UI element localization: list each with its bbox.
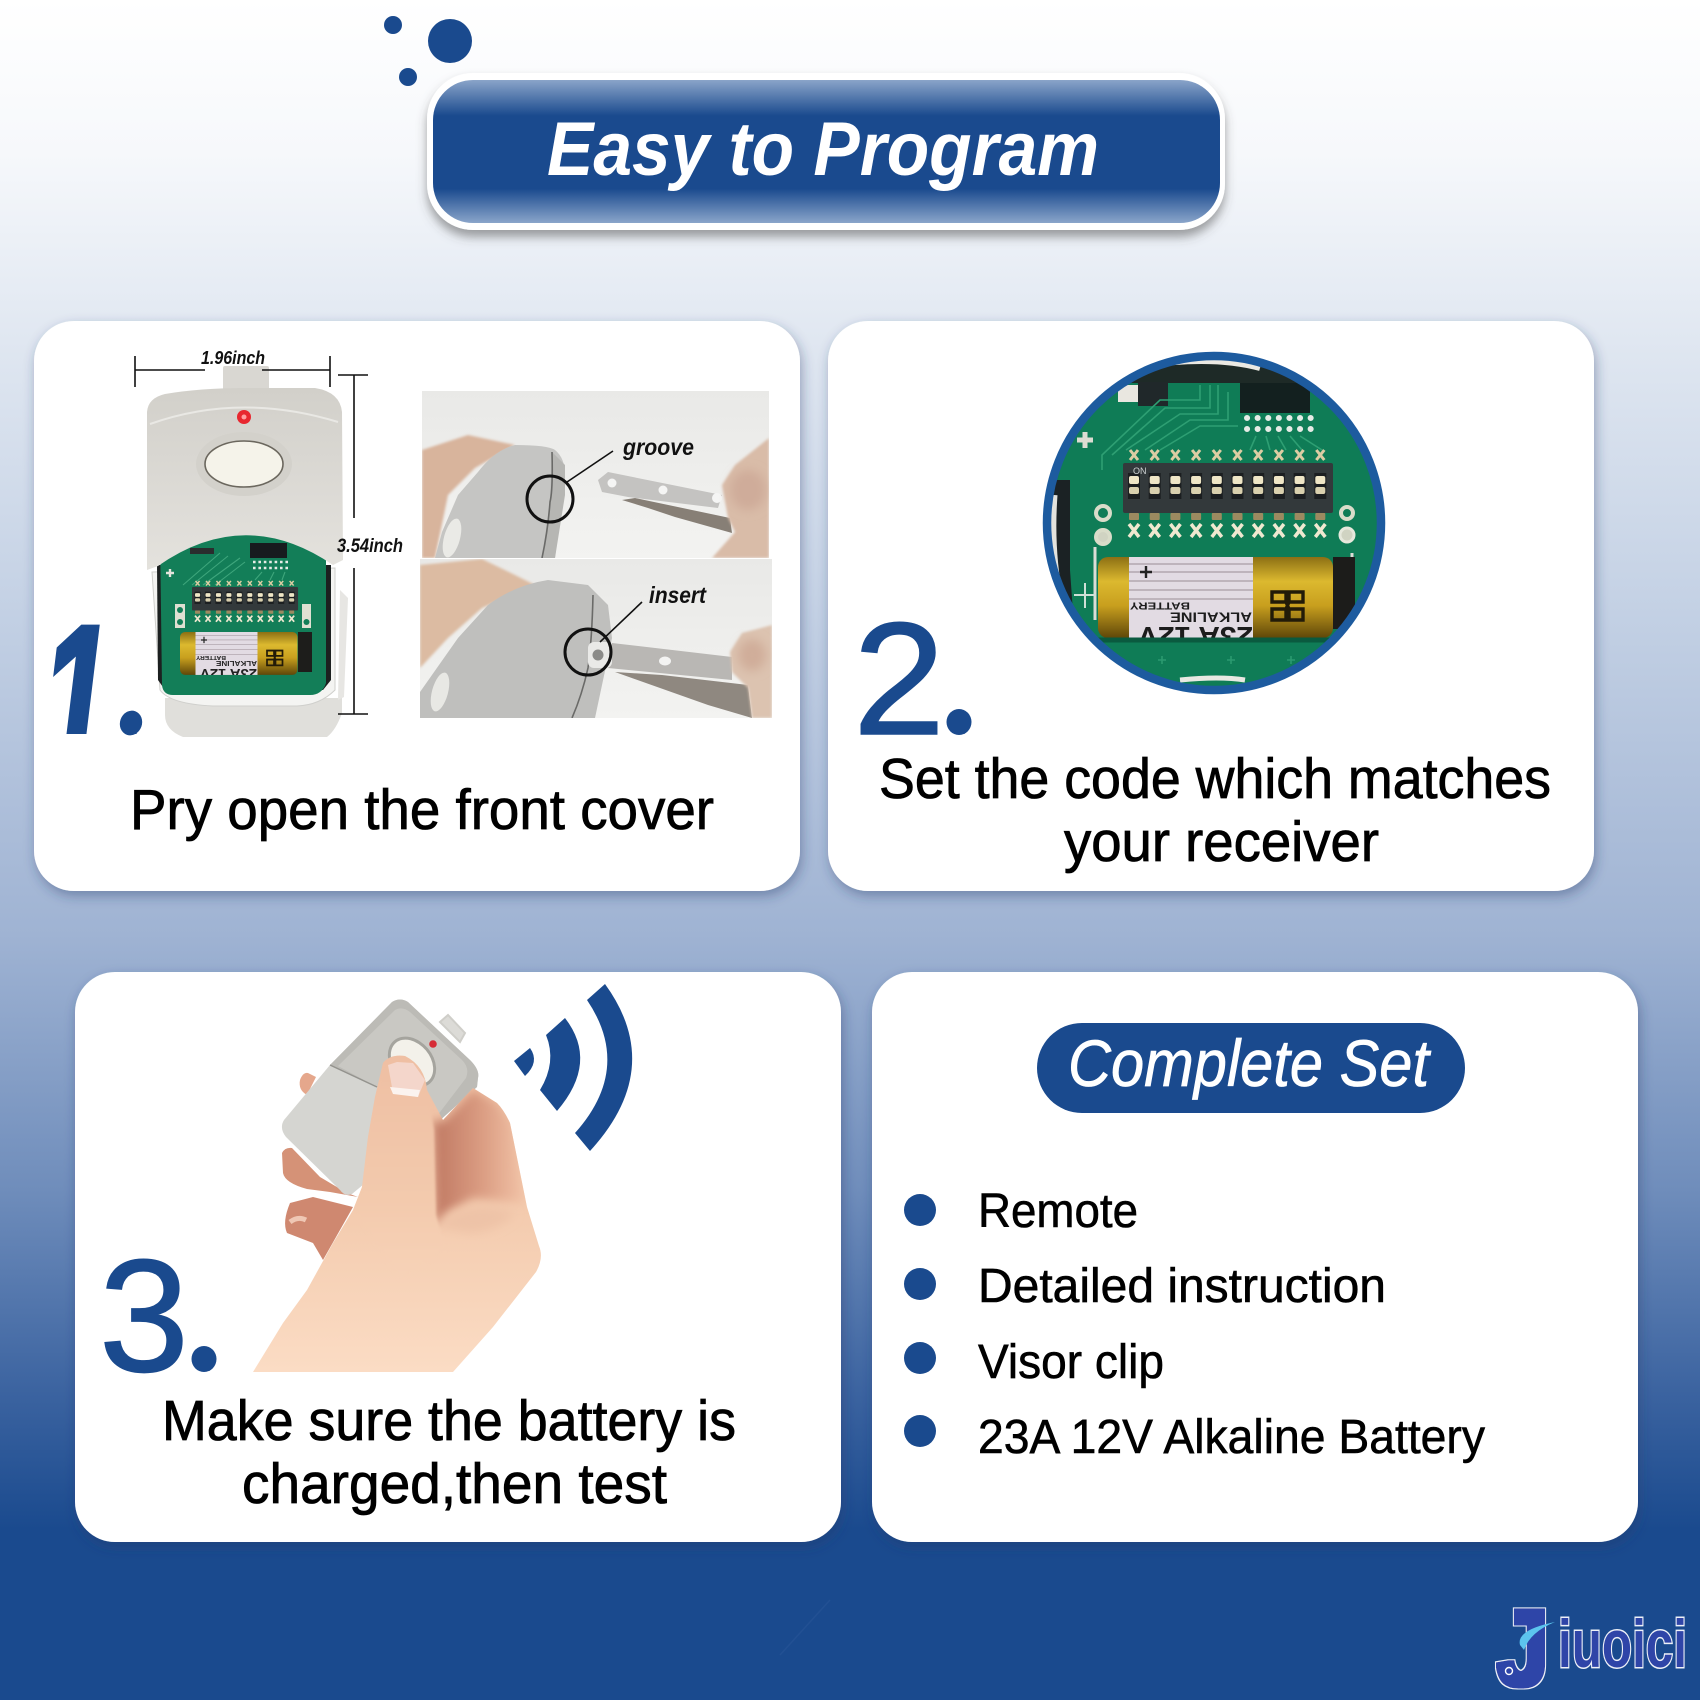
list item: visor clip	[904, 1336, 1164, 1389]
photo: insert: insert	[649, 582, 707, 608]
caption step 2: Set the code which matches	[879, 747, 1551, 811]
panel: step 3	[75, 972, 841, 1542]
battery label: ALKALINE	[216, 659, 257, 666]
number 1	[53, 624, 142, 736]
decorative dots	[384, 16, 472, 86]
panel: complete set	[872, 972, 1638, 1542]
list item: instruction: Detailed instruction	[978, 1260, 1386, 1313]
dimension: height	[337, 375, 403, 714]
battery label: ALKALINE	[1170, 610, 1252, 626]
list item: visor clip: Visor clip	[978, 1336, 1164, 1389]
panel: step 2	[828, 321, 1594, 891]
number 3: 3	[99, 1226, 189, 1405]
heading pill: Complete Set	[1068, 1026, 1431, 1100]
number 3: .	[195, 1308, 214, 1386]
caption step 1: Pry open the front cover	[130, 778, 714, 842]
number 2: 2	[853, 589, 945, 768]
list item: battery: 23A 12V Alkaline Battery	[978, 1411, 1485, 1464]
battery label: 23A 12V	[1138, 621, 1253, 652]
battery label	[196, 656, 257, 675]
dimension: width	[135, 348, 330, 387]
battery label: 23A 12V	[199, 666, 257, 682]
panel: step 1	[34, 321, 800, 891]
number 2: .	[950, 671, 969, 749]
title banner	[427, 73, 1225, 230]
switch label: ON	[1133, 466, 1146, 476]
dimension: width: 1.96inch	[201, 348, 265, 368]
number 1: 1	[42, 585, 110, 804]
icon: remote with open cover	[147, 366, 348, 737]
icon: hand pressing remote	[253, 1000, 541, 1372]
battery label	[1130, 602, 1252, 638]
photo: insert	[420, 559, 772, 718]
photo: groove	[422, 391, 769, 559]
icon: wireless signal arcs	[514, 984, 632, 1151]
icon: circuit board lens	[1040, 350, 1390, 700]
number 1: .	[122, 671, 141, 749]
battery label: BATTERY	[196, 654, 226, 660]
caption step 2: your receiver	[1064, 810, 1379, 874]
list item: remote: Remote	[978, 1185, 1138, 1238]
dimension: height: 3.54inch	[337, 536, 403, 557]
battery label: BATTERY	[1130, 600, 1190, 610]
caption step 3	[162, 1389, 736, 1516]
photo: groove: groove	[622, 434, 694, 460]
title text: Easy to Program	[547, 107, 1099, 192]
logo: Jiuoici	[1497, 1587, 1687, 1700]
caption step 2	[879, 747, 1551, 874]
caption step 3: Make sure the battery is	[162, 1389, 736, 1453]
caption step 3: charged,then test	[242, 1452, 667, 1516]
list item: remote	[904, 1185, 1138, 1238]
